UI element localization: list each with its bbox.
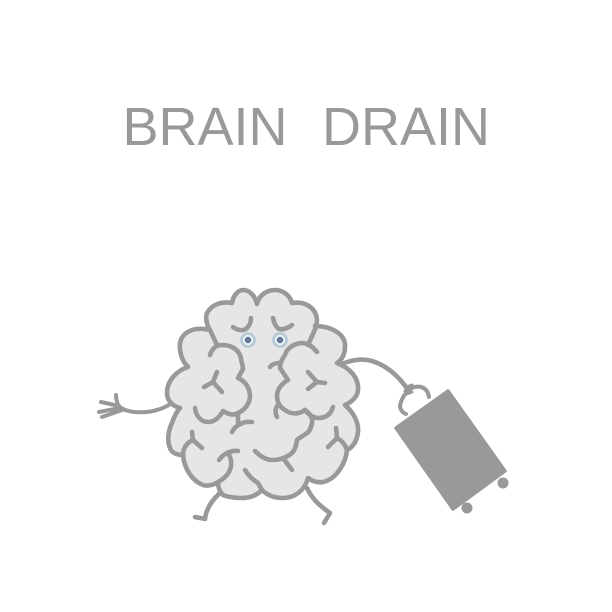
title: DRAIN [322,97,490,157]
brain character [99,290,408,523]
right eye [274,334,286,346]
title: BRAIN [122,97,288,157]
left eye [242,334,254,346]
left leg [195,493,220,519]
brain folds [183,325,347,490]
suitcase handle and gripping hand [400,385,429,414]
right arm [340,360,408,390]
right leg [307,488,330,523]
left arm and hand [99,395,172,417]
suitcase [396,385,508,514]
right eyebrow [273,318,292,329]
suitcase wheels [462,478,508,514]
left eyebrow [233,318,251,330]
suitcase body [396,391,505,509]
brain outline [167,290,358,498]
